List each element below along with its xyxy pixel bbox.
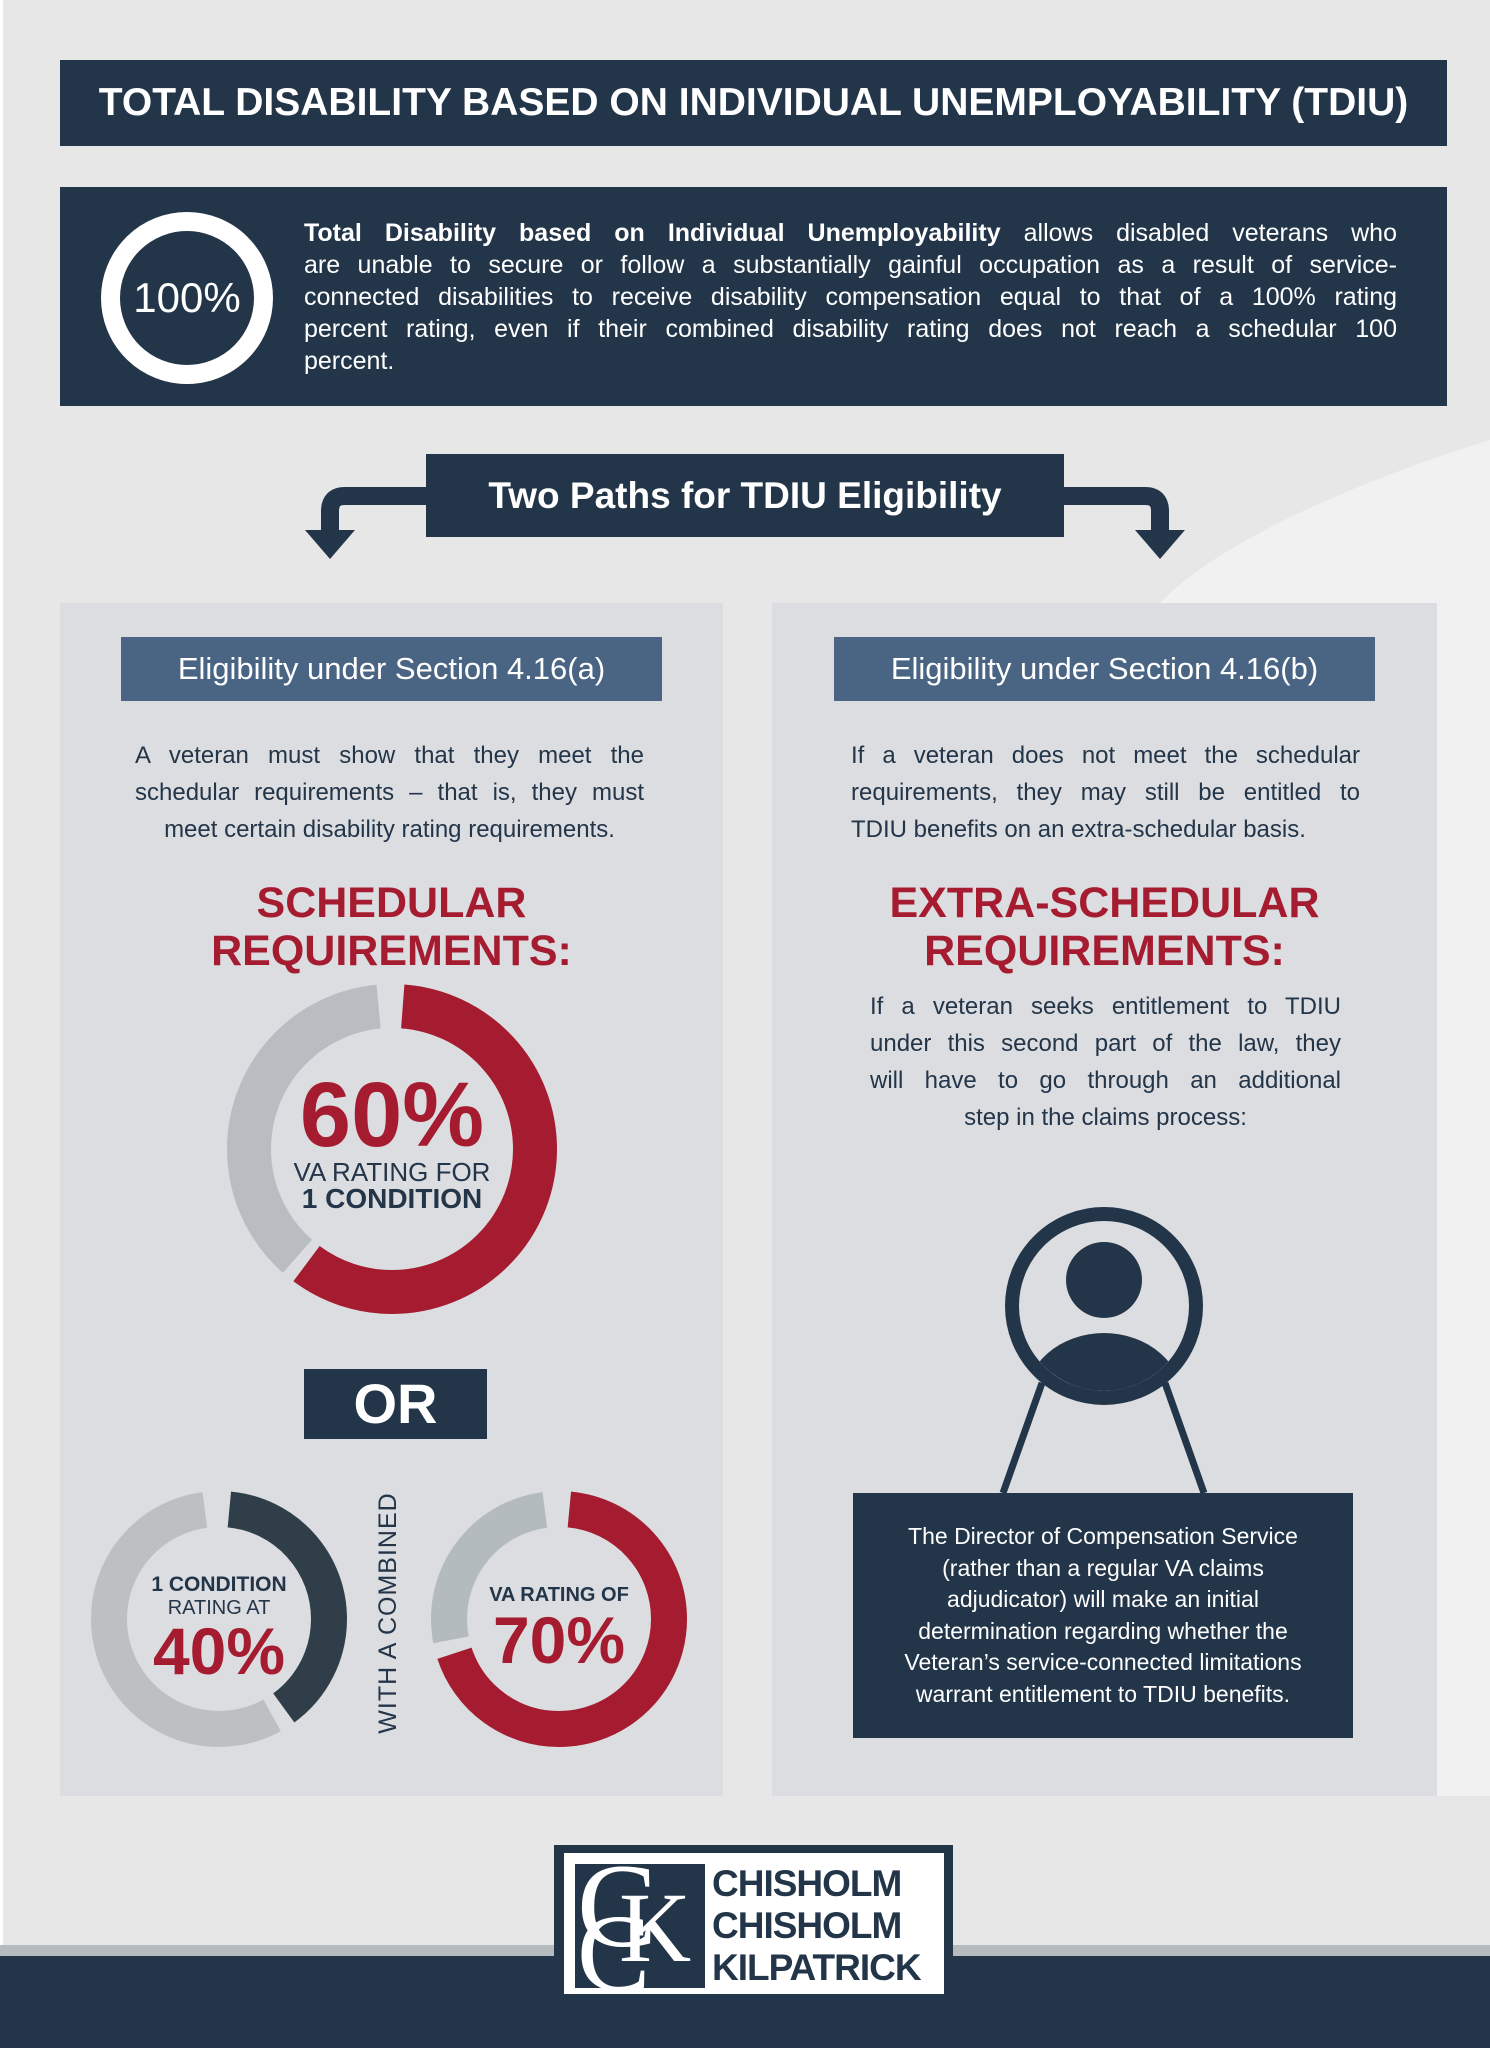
callout: director box: (rather than a regular VA claims xyxy=(942,1554,1264,1580)
paragraph a: schedular requirements – that is, they must xyxy=(135,779,644,806)
paragraph a xyxy=(135,742,644,843)
chart: 40% donut: 40% xyxy=(153,1614,285,1688)
arrows xyxy=(305,487,1185,559)
chart: 60% donut: VA RATING FOR xyxy=(294,1157,490,1187)
logo text: KILPATRICK xyxy=(712,1947,921,1988)
callout: director box: Veteran’s service-connected limitations xyxy=(904,1649,1302,1675)
logo xyxy=(554,1845,953,2001)
heading: schedular requirements: REQUIREMENTS: xyxy=(211,927,572,975)
title: TOTAL DISABILITY BASED ON INDIVIDUAL UNEMPLOYABILITY (TDIU) xyxy=(99,81,1408,124)
logo text: CHISHOLM xyxy=(712,1905,901,1946)
icon: CK monogram: K xyxy=(619,1872,691,1983)
paragraph extra: If a veteran seeks entitlement to TDIU xyxy=(870,993,1341,1020)
heading: two paths: Two Paths for TDIU Eligibility xyxy=(488,475,1002,516)
icon: 100% circle: 100% xyxy=(133,274,241,321)
panel: section 4.16(a) xyxy=(60,603,723,1796)
paragraph b: requirements, they may still be entitled to xyxy=(851,779,1360,806)
section header b: Eligibility under Section 4.16(b) xyxy=(891,651,1318,686)
heading: extra-schedular requirements: EXTRA-SCHEDULAR xyxy=(890,879,1320,927)
paragraph extra: will have to go through an additional xyxy=(870,1067,1341,1094)
chart: 60% donut: 1 CONDITION xyxy=(302,1183,482,1214)
callout: director box: warrant entitlement to TDIU benefits. xyxy=(916,1680,1290,1706)
intro text: percent. xyxy=(304,347,394,375)
intro text xyxy=(304,219,1397,375)
heading: schedular requirements: SCHEDULAR xyxy=(257,879,526,927)
heading: two paths xyxy=(426,454,1064,537)
logo text: CHISHOLM xyxy=(712,1863,901,1904)
paragraph a: meet certain disability rating requirements. xyxy=(164,816,615,843)
icon: 100% circle xyxy=(101,212,273,384)
chart: 40% donut xyxy=(91,1492,347,1747)
intro text: connected disabilities to receive disability compensation equal to that of a 100% rating xyxy=(304,283,1397,311)
chart: 70% donut: 70% xyxy=(493,1603,625,1677)
icon: CK monogram xyxy=(575,1864,705,1988)
paragraph b: TDIU benefits on an extra-schedular basis. xyxy=(851,816,1306,843)
intro text: are unable to secure or follow a substantially gainful occupation as a result of service- xyxy=(304,251,1397,279)
chart: 60% donut: 60% xyxy=(300,1064,484,1166)
callout: director box xyxy=(853,1493,1353,1738)
panel: section 4.16(b) xyxy=(772,603,1437,1796)
paragraph b xyxy=(851,742,1360,843)
paragraph extra xyxy=(870,993,1341,1131)
paragraph b: If a veteran does not meet the schedular xyxy=(851,742,1360,769)
callout: director box: The Director of Compensation Service xyxy=(908,1523,1298,1549)
heading: extra-schedular requirements xyxy=(890,879,1320,975)
section header b xyxy=(834,637,1375,701)
callout: director box: adjudicator) will make an initial xyxy=(947,1586,1259,1612)
footer band xyxy=(0,1945,1490,2048)
chart: 40% donut: 1 CONDITION xyxy=(151,1573,287,1596)
heading: extra-schedular requirements: REQUIREMENTS: xyxy=(924,927,1285,975)
icon: person xyxy=(1000,1207,1208,1493)
intro text: percent rating, even if their combined disability rating does not reach a schedular 100 xyxy=(304,315,1397,343)
chart: 40% donut: RATING AT xyxy=(168,1597,270,1619)
paragraph a: A veteran must show that they meet the xyxy=(135,742,644,769)
chart: 70% donut xyxy=(431,1492,687,1747)
intro text: Total Disability based on Individual Unemployability allows disabled veterans who xyxy=(304,219,1397,247)
heading: schedular requirements xyxy=(211,879,572,975)
paragraph extra: under this second part of the law, they xyxy=(870,1030,1341,1057)
OR box xyxy=(304,1369,487,1439)
section header a xyxy=(121,637,662,701)
chart: 70% donut: VA RATING OF xyxy=(489,1584,629,1606)
section header a: Eligibility under Section 4.16(a) xyxy=(178,651,605,686)
intro panel xyxy=(60,187,1447,406)
callout: director box: determination regarding whether the xyxy=(918,1618,1288,1644)
OR box: OR xyxy=(354,1372,438,1435)
chart: 60% donut xyxy=(227,984,557,1314)
logo text xyxy=(712,1863,922,1988)
vertical label: WITH A COMBINED xyxy=(374,1492,402,1734)
title xyxy=(60,60,1447,146)
paragraph extra: step in the claims process: xyxy=(964,1104,1247,1131)
